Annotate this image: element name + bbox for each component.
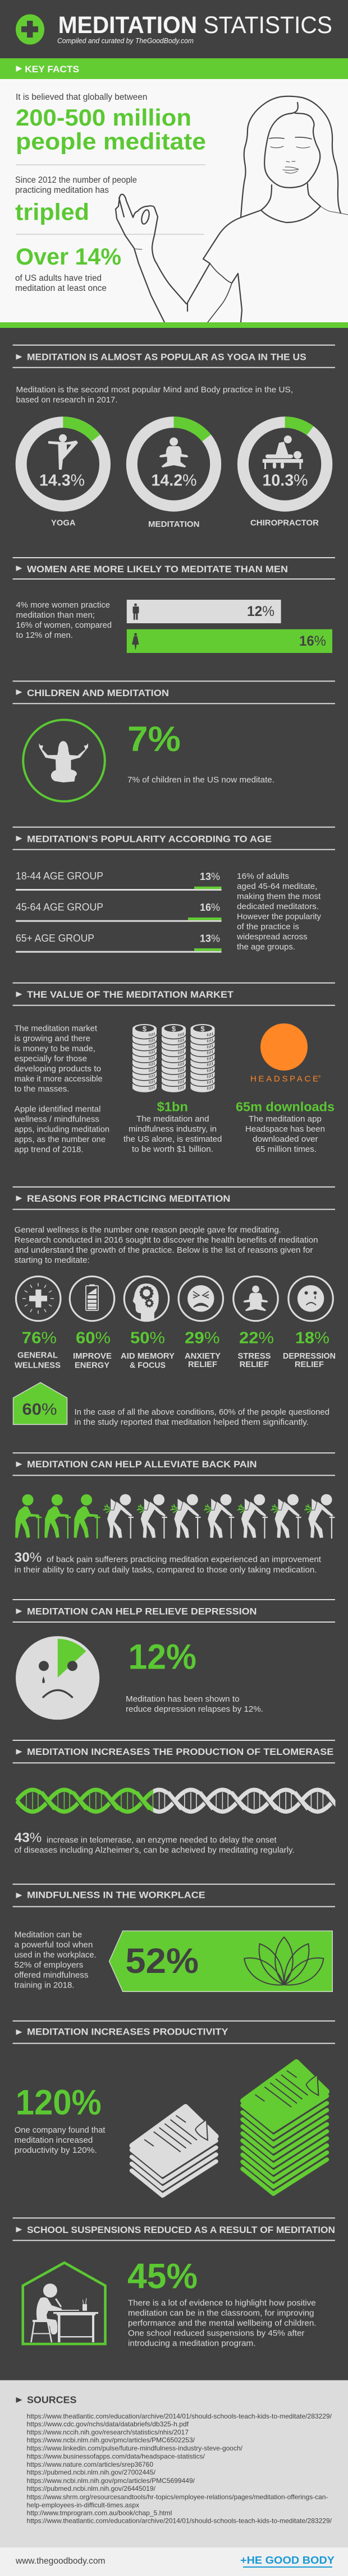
- text block: [15, 2125, 106, 2155]
- text block: [236, 872, 321, 952]
- text block: market: is growing and there: [15, 1034, 90, 1043]
- text block: apple: Apple identified mental: [15, 1104, 101, 1114]
- heading: popularity by age: [12, 827, 335, 850]
- icon: meditating figure: [159, 437, 189, 467]
- reason: general wellness 76%: WELLNESS: [15, 1361, 61, 1370]
- text block: 16% of adults: [237, 872, 289, 881]
- heading: sources: SOURCES: [27, 2394, 76, 2406]
- list of source urls: [27, 2412, 332, 2525]
- text block: apple: app trend of 2018.: [15, 1145, 84, 1154]
- reason: depression relief 18%: 18%: [295, 1329, 329, 1347]
- heading: reasons: [12, 1187, 335, 1210]
- text block: However the popularity: [237, 912, 321, 921]
- icon: sad face: [297, 1285, 324, 1312]
- reason: depression relief 18%: RELIEF: [295, 1360, 324, 1369]
- bar: 65+ age group: 13%: [200, 933, 220, 944]
- text block: of the practice is: [237, 922, 299, 932]
- reason: general wellness 76%: GENERAL: [17, 1351, 58, 1360]
- heading: depression: MEDITATION CAN HELP RELIEVE DEPRESSION: [27, 1606, 257, 1617]
- text block: dedicated meditators.: [237, 902, 319, 911]
- reason: anxiety relief 29%: ANXIETY: [185, 1351, 221, 1361]
- stat: $1bn: $1bn: [157, 1099, 188, 1114]
- text block: 43%: [15, 1831, 42, 1846]
- reason: stress relief 22%: [233, 1276, 278, 1369]
- icon: meditating woman line drawing: [116, 96, 348, 322]
- text block: of back pain sufferers practicing meditation experienced an improvement: [47, 1555, 322, 1564]
- list of source urls: https://www.businessofapps.com/data/headspace-statistics/: [27, 2453, 205, 2461]
- list of source urls: https://www.nature.com/articles/srep36760: [27, 2461, 153, 2468]
- panel: back pain: [12, 1452, 335, 1574]
- stat: $1bn: [123, 1099, 222, 1154]
- heading: workplace: MINDFULNESS IN THE WORKPLACE: [27, 1890, 205, 1901]
- reason: aid memory and focus 50%: 50%: [130, 1329, 165, 1347]
- text: over 14%: [15, 243, 121, 293]
- text block: market: make it more accessible: [15, 1074, 103, 1083]
- callout: 60% helped significantly: In the case of all the above conditions, 60% of the people questioned: [74, 1407, 329, 1417]
- icon: sad face with 12% wedge: [16, 1636, 99, 1720]
- text block: Meditation is the second most popular Mind and Body practice in the US,: [16, 385, 293, 395]
- text block: a powerful tool when: [15, 1940, 93, 1950]
- donut chart: meditation 14.2%: [132, 422, 216, 529]
- icon: chiropractor and patient: [263, 435, 303, 469]
- icon: lotus: [244, 1937, 323, 1985]
- heading: productivity: MEDITATION INCREASES PRODUCTIVITY: [27, 2027, 228, 2037]
- stat: 65m downloads: 65 million times.: [256, 1145, 317, 1154]
- text: global meditators: people meditate: [16, 128, 206, 155]
- panel: reasons for practicing: [12, 1187, 336, 1427]
- reason: stress relief 22%: 22%: [239, 1329, 274, 1347]
- text block: apple: apps, as the number one: [15, 1134, 106, 1144]
- text: global meditators: [16, 92, 206, 155]
- list of source urls: https://pubmed.ncbi.nlm.nih.gov/27002445/: [27, 2468, 156, 2476]
- text block: and understand the growth of the practice. Below is the list of reasons given for: [15, 1245, 313, 1255]
- callout: 52% with lotus: 52%: [125, 1942, 199, 1981]
- donut chart: yoga 14.3%: 14.3%: [39, 472, 85, 490]
- text block: One company found that: [15, 2125, 106, 2135]
- text block: market: is money to be made,: [15, 1044, 95, 1053]
- text: global meditators: 200-500 million: [16, 104, 191, 131]
- bar: 45-64 age group: 45-64 AGE GROUP: [16, 902, 103, 913]
- footer: [0, 2547, 348, 2576]
- stat: 65m downloads: The meditation app: [249, 1114, 322, 1124]
- reason: stress relief 22%: RELIEF: [240, 1360, 269, 1369]
- reason: general wellness 76%: 76%: [22, 1329, 57, 1347]
- icon: anxious face: [187, 1285, 214, 1312]
- list of source urls: https://www.ncbi.nlm.nih.gov/pmc/articles/PMC5699449/: [27, 2477, 195, 2485]
- panel: telomerase: [12, 1740, 340, 1855]
- text block: Meditation can be: [15, 1930, 82, 1940]
- bar: 18-44 age group: 18-44 AGE GROUP: [16, 870, 103, 882]
- donut chart: yoga 14.3%: [21, 422, 105, 528]
- text block: Meditation has been shown to: [126, 1694, 240, 1704]
- heading: children: [12, 680, 335, 704]
- heading: women more likely: WOMEN ARE MORE LIKELY TO MEDITATE THAN MEN: [27, 564, 288, 574]
- text: tripled: Since 2012 the number of people: [15, 175, 137, 185]
- text block: 30%: [15, 1550, 42, 1565]
- text block: of diseases including Alzheimer’s, can be acheived by meditating regularly.: [15, 1845, 295, 1855]
- heading: market value: [12, 983, 335, 1006]
- panel: school suspensions: [12, 2217, 335, 2348]
- stat: 65m downloads: [236, 1099, 335, 1154]
- text block: 52% of employers: [15, 1961, 83, 1970]
- heading: back pain: [12, 1452, 335, 1476]
- callout: 60% helped significantly: 60%: [22, 1401, 57, 1419]
- text block: There is a lot of evidence to highlight how positive: [128, 2298, 316, 2308]
- donut chart: meditation 14.2%: 14.2%: [152, 472, 196, 490]
- title: MEDITATION STATISTICS: [58, 12, 332, 39]
- text block: used in the workplace.: [15, 1950, 97, 1960]
- text: tripled: practicing meditation has: [15, 186, 109, 195]
- text block: [16, 600, 112, 640]
- reason: improve energy 60%: 60%: [76, 1329, 111, 1347]
- text block: 16% of women, compared: [16, 620, 112, 630]
- list of source urls: https://www.theatlantic.com/education/archive/2014/01/should-schools-teach-kids-to-meditate/283229/: [27, 2517, 332, 2525]
- text: over 14%: of US adults have tried: [15, 274, 102, 283]
- text block: [15, 1930, 97, 1990]
- donut chart: chiropractor 10.3%: [243, 422, 327, 528]
- heading: depression: [12, 1599, 335, 1623]
- icon: headspace logo: ®: [318, 1075, 321, 1079]
- text block: [128, 2298, 317, 2348]
- heading: reasons: REASONS FOR PRACTICING MEDITATION: [27, 1193, 230, 1204]
- donut chart: chiropractor 10.3%: 10.3%: [263, 472, 308, 490]
- icon: battery: [86, 1285, 98, 1310]
- callout: 60% helped significantly: in the study reported that meditation helped them significantly.: [74, 1417, 309, 1427]
- heading: market value: THE VALUE OF THE MEDITATION MARKET: [27, 989, 234, 1000]
- text block: starting to meditate:: [15, 1255, 90, 1265]
- reason: improve energy 60%: IMPROVE: [73, 1351, 112, 1361]
- heading: almost as popular as yoga: [12, 345, 335, 368]
- subtitle: Compiled and curated by TheGoodBody.com: [57, 36, 194, 45]
- text block: introducing a meditation program.: [128, 2338, 256, 2348]
- text: global meditators: It is believed that globally between: [16, 92, 147, 102]
- text block: aged 45-64 meditate,: [237, 882, 317, 891]
- key facts banner: [0, 58, 348, 79]
- icon: logo green circle with plus: [16, 15, 44, 45]
- reason: aid memory and focus 50%: AID MEMORY: [121, 1351, 175, 1361]
- stat: 45%: 45%: [127, 2257, 198, 2296]
- panel: depression: [12, 1599, 335, 1720]
- text block: the age groups.: [237, 942, 295, 952]
- list of source urls: http://www.tmprogram.com.au/book/chap_5.html: [27, 2509, 172, 2517]
- text block: market: to the masses.: [15, 1084, 69, 1094]
- icon: yoga pose: [48, 434, 78, 470]
- icon: coin stacks: [132, 1024, 214, 1092]
- text block: meditation increased: [15, 2135, 93, 2145]
- bar: 18-44 age group: [16, 870, 222, 891]
- stat: 65m downloads: downloaded over: [253, 1134, 318, 1144]
- text block: increase in telomerase, an enzyme needed to delay the onset: [47, 1835, 277, 1845]
- footer url: www.thegoodbody.com: [15, 2556, 105, 2566]
- reason: anxiety relief 29%: RELIEF: [188, 1360, 217, 1369]
- donut chart: chiropractor 10.3%: CHIROPRACTOR: [250, 518, 319, 528]
- text block: market: The meditation market: [15, 1023, 98, 1033]
- list of source urls: https://www.linkedin.com/pulse/future-mindfulness-industry-steve-gooch/: [27, 2444, 243, 2452]
- text block: market: [15, 1023, 103, 1094]
- icon: child meditating in circle: [23, 720, 105, 801]
- text block: meditation than men;: [16, 610, 95, 620]
- text block: [15, 1831, 295, 1855]
- panel: children and meditation: [12, 680, 335, 801]
- bar: men 12%: [127, 600, 281, 623]
- text block: apple: [14, 1104, 109, 1154]
- text block: apple: wellness / mindfulness: [14, 1114, 99, 1124]
- text block: productivity by 120%.: [15, 2146, 97, 2155]
- icon: head with gears: [132, 1284, 159, 1321]
- panel: sources: [0, 2380, 348, 2547]
- text block: offered mindfulness: [15, 1971, 88, 1980]
- text block: 7% of children in the US now meditate.: [127, 775, 274, 785]
- list of source urls: https://pubmed.ncbi.nlm.nih.gov/26445019/: [27, 2485, 156, 2492]
- reason: improve energy 60%: [70, 1276, 115, 1370]
- stat: $1bn: the US alone, is estimated: [123, 1134, 222, 1144]
- list of source urls: https://www.theatlantic.com/education/archive/2014/01/should-schools-teach-kids-to-meditate/283229/: [27, 2412, 332, 2420]
- text block: market: developing products to: [15, 1064, 101, 1073]
- list of source urls: https://www.cdc.gov/nchs/data/databriefs/db325-h.pdf: [27, 2420, 189, 2428]
- heading: school suspensions: SCHOOL SUSPENSIONS REDUCED AS A RESULT OF MEDITATION: [27, 2225, 335, 2235]
- stat: 65m downloads: 65m downloads: [236, 1099, 335, 1114]
- panel: women versus men: [12, 557, 335, 653]
- icon: cross with rays: [22, 1283, 54, 1314]
- text block: [15, 1225, 318, 1265]
- text block: Research conducted in 2016 sought to discover the health benefits of meditation: [15, 1235, 318, 1245]
- heading: children: CHILDREN AND MEDITATION: [27, 688, 169, 698]
- text: tripled: tripled: [15, 199, 89, 225]
- icon: coin stacks: $: [200, 1025, 205, 1033]
- text block: market: especially for those: [15, 1054, 87, 1063]
- text block: One school reduced suspensions by 45% after: [128, 2328, 304, 2338]
- reason: depression relief 18%: DEPRESSION: [283, 1351, 336, 1361]
- icon: headspace logo: HEADSPACE: [250, 1074, 318, 1083]
- bar: 65+ age group: [16, 933, 222, 953]
- pictogram: 3 of 10 back pain sufferers improved: [15, 1494, 335, 1539]
- text block: training in 2018.: [15, 1981, 75, 1990]
- chart: dna strand 43% filled: [17, 1790, 340, 1811]
- text block: [16, 385, 293, 405]
- text block: performance and the mental wellbeing of children.: [128, 2318, 317, 2328]
- stat: 12%: 12%: [128, 1638, 196, 1677]
- callout: 60% helped significantly: [13, 1382, 329, 1427]
- icon: coin stacks: $: [143, 1025, 147, 1033]
- icon: headspace logo: [250, 1023, 321, 1083]
- heading: productivity: [12, 2021, 335, 2044]
- donut chart: meditation 14.2%: MEDITATION: [148, 520, 200, 529]
- reason: anxiety relief 29%: [178, 1276, 223, 1369]
- text: tripled: [15, 175, 137, 225]
- list of source urls: help-employees-in-difficult-times.aspx: [27, 2501, 139, 2509]
- text block: in their ability to carry out daily tasks, compared to those only taking medication.: [15, 1565, 317, 1574]
- heading: telomerase: MEDITATION INCREASES THE PRODUCTION OF TELOMERASE: [27, 1746, 333, 1757]
- panel: productivity: [12, 2021, 335, 2195]
- heading: workplace: [12, 1884, 335, 1907]
- text block: apple: apps, including meditation: [15, 1124, 109, 1134]
- donut chart: yoga 14.3%: YOGA: [51, 518, 76, 528]
- text block: 4% more women practice: [16, 600, 110, 610]
- heading: back pain: MEDITATION CAN HELP ALLEVIATE BACK PAIN: [27, 1459, 257, 1470]
- text block: reduce depression relapses by 12%.: [126, 1704, 263, 1714]
- reason: improve energy 60%: ENERGY: [75, 1361, 109, 1370]
- stat: 65m downloads: Headspace has been: [245, 1124, 325, 1134]
- bar: women 16%: 16%: [299, 633, 326, 649]
- callout: 52% with lotus: [109, 1931, 332, 1991]
- stat: $1bn: The meditation and: [136, 1114, 209, 1124]
- bar: 45-64 age group: 16%: [200, 902, 220, 913]
- reason: general wellness 76%: [15, 1276, 61, 1370]
- list of source urls: https://www.shrm.org/resourcesandtools/hr-topics/employee-relations/pages/meditation-offerings-can-: [27, 2493, 328, 2501]
- text: over 14%: Over 14%: [16, 243, 121, 270]
- key facts banner: KEY FACTS: [25, 64, 79, 75]
- bar: 45-64 age group: [16, 902, 222, 922]
- text block: meditation can be in the classroom, for improving: [128, 2308, 314, 2318]
- heading: popularity by age: MEDITATION’S POPULARITY ACCORDING TO AGE: [27, 834, 272, 845]
- text block: [126, 1694, 263, 1714]
- text: over 14%: meditation at least once: [15, 284, 107, 293]
- heading: telomerase: [12, 1740, 335, 1763]
- icon: large green paper stack: [242, 2062, 327, 2194]
- reason: aid memory and focus 50%: & FOCUS: [130, 1361, 166, 1370]
- bar: women 16%: [127, 629, 332, 653]
- icon: meditating figure: [243, 1286, 268, 1311]
- list of source urls: https://www.nccih.nih.gov/research/statistics/nhis/2017: [27, 2428, 189, 2436]
- panel: mindfulness in the workplace: [12, 1884, 335, 1991]
- reason: depression relief 18%: [283, 1276, 336, 1369]
- stat: $1bn: mindfulness industry, in: [129, 1124, 217, 1134]
- reason: anxiety relief 29%: 29%: [185, 1329, 220, 1347]
- text block: based on research in 2017.: [16, 395, 118, 405]
- panel: key facts: [0, 79, 348, 322]
- stat: 120%: 120%: [16, 2083, 102, 2122]
- panel: popularity compared with yoga: [12, 345, 335, 529]
- icon: small paper stack: [131, 2107, 216, 2195]
- list of source urls: https://www.ncbi.nlm.nih.gov/pmc/articles/PMC6502253/: [27, 2436, 195, 2444]
- panel: popularity by age: [12, 827, 335, 953]
- heading: school suspensions: [12, 2217, 335, 2241]
- text block: to 12% of men.: [16, 631, 73, 640]
- header panel: [0, 0, 348, 58]
- text block: [15, 1550, 322, 1574]
- icon: coin stacks: $: [172, 1025, 176, 1033]
- text block: General wellness is the number one reason people gave for meditating.: [15, 1225, 281, 1235]
- panel: value of the market: [12, 983, 335, 1154]
- reason: stress relief 22%: STRESS: [238, 1351, 271, 1361]
- logo: the good body: +HE GOOD BODY: [240, 2555, 335, 2566]
- heading: almost as popular as yoga: MEDITATION IS ALMOST AS POPULAR AS YOGA IN THE US: [27, 352, 306, 363]
- bar: 18-44 age group: 13%: [200, 871, 220, 882]
- reason: aid memory and focus 50%: [121, 1276, 175, 1370]
- stat: 7%: 7%: [127, 720, 181, 759]
- heading: women more likely: [12, 557, 335, 580]
- bar: men 12%: 12%: [247, 604, 274, 619]
- stat: $1bn: to be worth $1 billion.: [132, 1145, 213, 1154]
- text block: widespread across: [236, 932, 308, 942]
- text block: making them the most: [237, 892, 321, 901]
- bar: 65+ age group: 65+ AGE GROUP: [16, 933, 94, 944]
- icon: student at desk inside house: [23, 2263, 106, 2344]
